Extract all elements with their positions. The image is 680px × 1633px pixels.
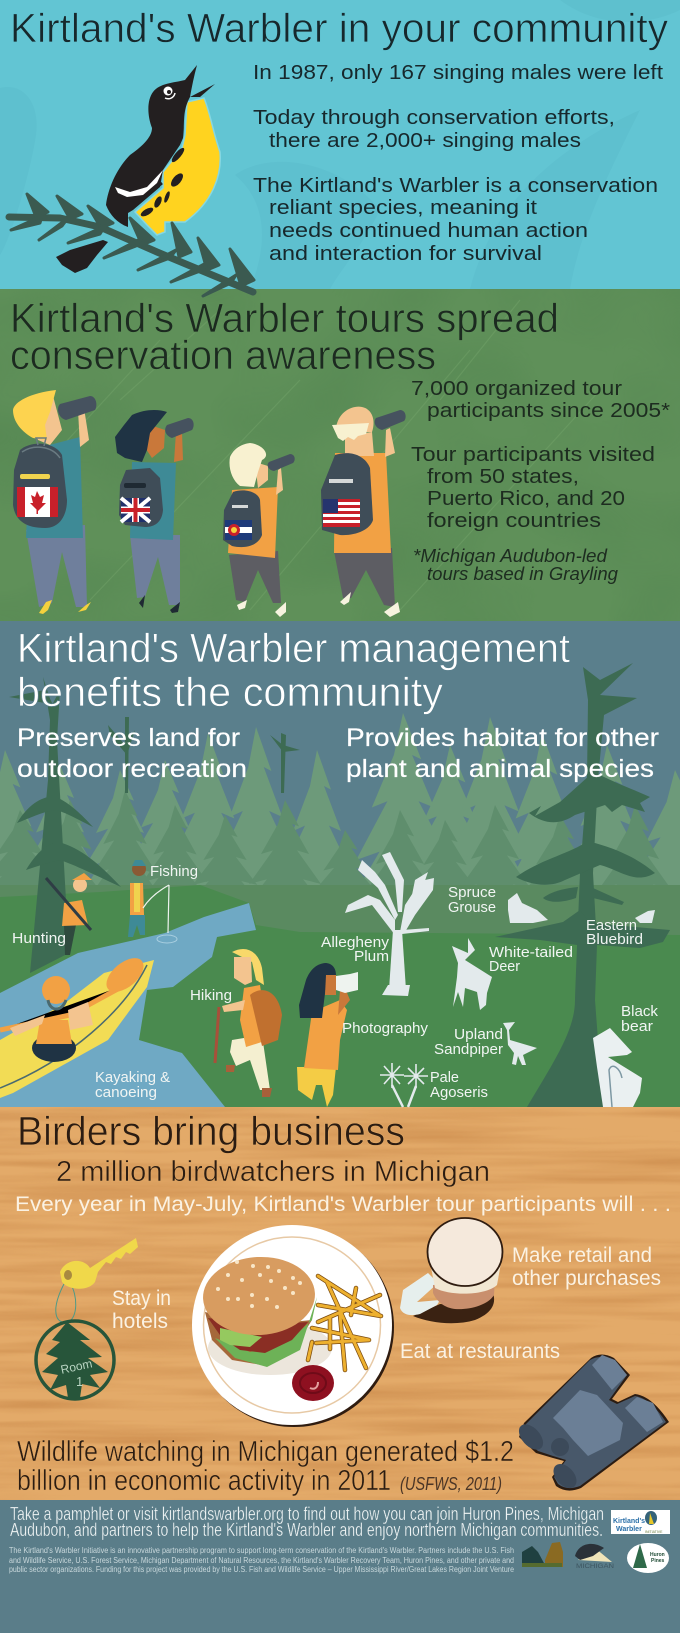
subheading: habitat: plant and animal species [346,755,654,783]
label: sandpiper: Sandpiper [434,1042,503,1058]
text: tour facts: foreign countries [427,510,601,532]
activity: hunting [12,873,92,955]
logo: Kirtland's Warbler Initiative: Kirtland's [613,1518,645,1525]
subheading: recreation [17,724,247,783]
label: restaurants: Eat at restaurants [400,1340,560,1363]
text: population facts: there are 2,000+ singing males [269,130,581,152]
logo: Kirtland's Warbler Initiative [611,1510,670,1534]
heading: community: Kirtland's Warbler management [17,625,571,671]
heading: tours: Kirtland's Warbler tours spread [10,295,559,341]
intro line: Every year in May-July, Kirtland's Warbler tour participants will . . . [15,1193,671,1216]
heading: birders: Birders bring business [17,1108,405,1154]
label: bluebird [586,918,643,948]
logo: Michigan Audubon [575,1544,614,1570]
key tag label: 1 [76,1374,83,1389]
label: purchases [512,1244,661,1290]
species: pale agoseris [380,1063,488,1107]
label: sandpiper: Upland [454,1027,503,1043]
label: agoseris [430,1070,488,1101]
logo: Kirtland's Warbler Initiative: Warbler [616,1526,642,1533]
credits text: and Wildlife Service, U.S. Forest Service, Michigan Department of Natural Resources, the Kirtland's Warbler Recovery Team, Huron Pines, and other private and [9,1556,514,1565]
icon: binoculars [514,1354,669,1492]
person: USA backpack [321,407,406,617]
subheading: recreation: Preserves land for [17,724,240,752]
label: deer [489,945,573,975]
species: upland sandpiper [434,1022,537,1065]
logo: Michigan Audubon: MICHIGAN [576,1564,614,1570]
credits text [9,1546,514,1574]
heading: tours: conservation awareness [10,332,436,378]
label: kayaking: canoeing [95,1085,157,1101]
label: purchases: other purchases [512,1267,661,1290]
text: population facts: needs continued human action [269,220,588,242]
panel: community benefits [0,625,680,1107]
icon: warbler bird [56,65,220,273]
activity: kayaking [0,952,170,1101]
icon: room key [36,1238,138,1399]
subheading: habitat [346,724,659,783]
species: spruce grouse [448,885,548,923]
text: tour facts: participants since 2005* [427,400,670,422]
label: Allegheny Plum: Plum [354,949,389,965]
text: tour facts: Puerto Rico, and 20 [427,488,625,510]
statistic: economic activity: (USFWS, 2011) [400,1474,502,1494]
call to action [10,1504,604,1540]
panel: footer [9,1504,670,1574]
icon: plate with burger and fries [192,1225,394,1427]
species: white-tailed deer [452,938,573,1010]
person: Colorado backpack [223,443,295,617]
heading: community [17,625,571,715]
panel: tours [10,295,670,617]
label: Allegheny Plum [321,935,390,965]
label: deer: Deer [489,959,520,975]
icon: pine branch [9,194,254,296]
species: Allegheny plum [321,852,434,996]
logo: Kirtland's Warbler Initiative: INITIATIVE [645,1530,663,1534]
label: agoseris: Agoseris [430,1085,488,1101]
label: Allegheny Plum: Allegheny [321,935,390,951]
logo: Huron Pines [627,1543,669,1573]
label: hotels: Stay in [112,1287,171,1310]
activity: hiking [190,949,282,1097]
icon: coffee mug [400,1218,503,1323]
label: kayaking [95,1070,170,1101]
text: tour facts: 7,000 organized tour [411,378,622,400]
text: tour facts: from 50 states, [427,466,579,488]
river [0,903,256,1107]
label: fishing: Fishing [150,864,198,880]
label: deer: White-tailed [489,945,573,961]
activity: fishing [128,860,198,943]
label: black bear [621,1004,659,1035]
heading: community: benefits the community [17,669,444,715]
label: sandpiper [434,1027,503,1058]
label: bluebird: Bluebird [586,932,643,948]
background forest scene [0,677,680,1107]
statistic: economic activity: Wildlife watching in Michigan generated $1.2 [17,1436,514,1468]
person: Canada backpack [13,390,96,614]
logo: landscape [522,1542,563,1567]
logo: Huron Pines: Pines [651,1558,665,1564]
heading: tours [10,295,559,378]
logo: Huron Pines: Huron [650,1552,665,1558]
label: black bear: Black [621,1004,659,1020]
subheading: habitat: Provides habitat for other [346,724,659,752]
label: hunting: Hunting [12,931,66,947]
text: population facts: reliant species, meaning it [269,197,538,219]
text: population facts: In 1987, only 167 singing males were left [253,62,663,84]
person: UK backpack [115,410,194,613]
credits text: public sector organizations. Funding for this project was provided by the U.S. Fish and Wildlife Service – Upper Mississippi River/Great Lakes Region Joint Venture [9,1565,514,1574]
key tag label: Room [59,1356,94,1377]
label: hiking: Hiking [190,988,232,1004]
credits text: The Kirtland's Warbler Initiative is an innovative partnership program to support long-term conservation of the Kirtland's Warbler. Partners include the U.S. Fish [9,1546,514,1555]
text: population facts: The Kirtland's Warbler is a conservation [253,175,658,197]
label: hotels: hotels [112,1310,168,1333]
text: population facts: Today through conservation efforts, [253,107,615,129]
label: purchases: Make retail and [512,1244,652,1267]
text: tour facts: Tour participants visited [411,444,655,466]
subheading: recreation: outdoor recreation [17,755,247,783]
key tag label [59,1356,94,1389]
label: agoseris: Pale [430,1070,459,1086]
text: tour facts: tours based in Grayling [427,564,618,584]
title: Kirtland's Warbler in your community [10,5,668,51]
label: spruce grouse: Grouse [448,900,496,916]
text: population facts [253,62,663,265]
large pine tree [495,663,670,1107]
label: kayaking: Kayaking & [95,1070,170,1086]
text: population facts: and interaction for survival [269,243,542,265]
label: black bear: bear [621,1019,653,1035]
label: spruce grouse [448,885,496,916]
panel: business [15,1108,671,1497]
activity: photography [297,963,429,1107]
label: bluebird: Eastern [586,918,637,934]
panel: warbler intro [10,5,668,273]
species: black bear [593,1004,659,1107]
label: photography: Photography [342,1021,429,1037]
statistic: economic activity: billion in economic activity in 2011 [17,1465,391,1497]
label: hotels [112,1287,171,1333]
statistic: economic activity [17,1436,514,1497]
species: eastern bluebird [586,910,655,948]
label: spruce grouse: Spruce [448,885,496,901]
text: tour facts: *Michigan Audubon-led [413,546,608,566]
text: tour facts [411,378,670,584]
subheading: birdwatchers: 2 million birdwatchers in Michigan [56,1156,490,1188]
